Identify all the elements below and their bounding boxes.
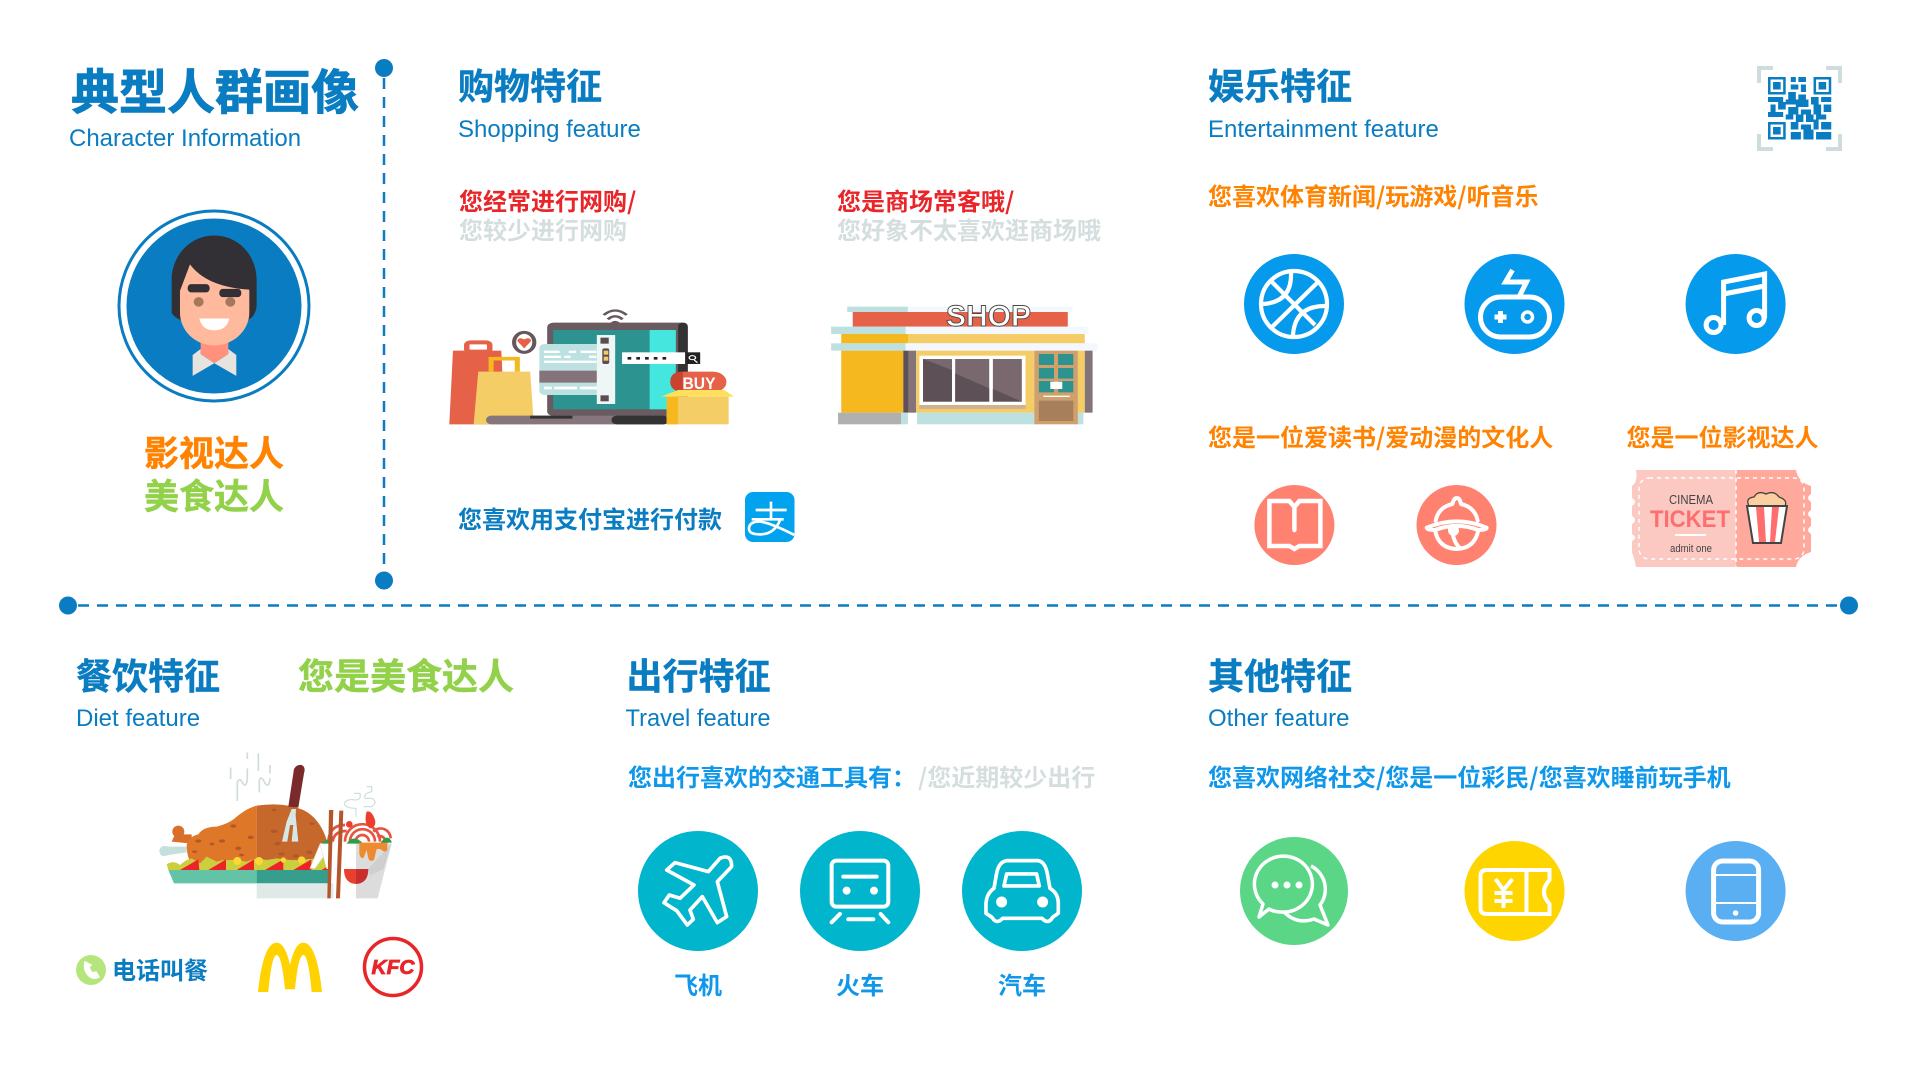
persona label: film: 影视达人 — [144, 435, 284, 474]
text: phone order: 电话叫餐 — [112, 951, 208, 986]
icon: basketball — [1244, 254, 1344, 354]
callout: food lover: 您是美食达人 — [298, 656, 514, 697]
panel: shopping — [449, 66, 1101, 542]
film fan text: 您是一位影视达人 — [1626, 418, 1818, 453]
label: train: 火车 — [836, 966, 884, 1001]
mall text: 您好象不太喜欢逛商场哦 — [837, 211, 1101, 246]
logo: McDonald's — [258, 943, 322, 992]
online shopping text — [459, 182, 636, 246]
logo: KFC — [364, 938, 422, 996]
subheading: Travel feature — [626, 705, 770, 732]
icon: lottery ticket — [1464, 841, 1564, 941]
subheading: Other feature — [1208, 705, 1349, 732]
infrequent travel text: /您近期较少出行 — [918, 758, 1095, 793]
QR code — [1759, 68, 1840, 149]
label: BUY: BUY — [682, 374, 716, 393]
icon: music — [1686, 254, 1786, 354]
icon: phone device — [1686, 841, 1786, 941]
culture text: 您是一位爱读书/爱动漫的文化人 — [1208, 418, 1553, 453]
heading: 餐饮特征 — [76, 656, 220, 697]
illustration: online shopping — [449, 310, 734, 424]
panel: character information — [69, 67, 359, 517]
panel: entertainment — [1208, 66, 1840, 567]
icon: car — [962, 831, 1082, 951]
heading: 出行特征 — [626, 656, 771, 697]
other traits text: 您喜欢网络社交/您是一位彩民/您喜欢睡前玩手机 — [1208, 758, 1731, 793]
heading: 购物特征 — [458, 66, 602, 107]
ticket — [1632, 470, 1811, 567]
shop sign: SHOP — [946, 300, 1031, 333]
heading: 其他特征 — [1208, 656, 1352, 697]
ticket: admit one — [1670, 543, 1712, 555]
icon: chat — [1240, 837, 1348, 945]
alipay text: 您喜欢用支付宝进行付款 — [458, 500, 722, 535]
interests text: 您喜欢体育新闻/玩游戏/听音乐 — [1208, 177, 1539, 212]
subheading: Diet feature — [76, 705, 200, 732]
icon: game controller — [1464, 254, 1564, 354]
online shopping text: 您较少进行网购 — [459, 211, 627, 246]
avatar — [119, 211, 309, 401]
panel: diet — [76, 656, 514, 996]
ticket: CINEMA — [1669, 492, 1713, 507]
subheading: Shopping feature — [458, 116, 641, 143]
label: car: 汽车 — [998, 966, 1046, 1001]
icon: train — [800, 831, 920, 951]
icon: bell — [1416, 485, 1496, 565]
illustration: food — [159, 752, 392, 898]
subheading: Entertainment feature — [1208, 116, 1439, 143]
panel: travel — [626, 656, 1095, 1001]
icon: phone — [76, 955, 106, 985]
subtitle: Character Information — [69, 125, 301, 152]
label: plane: 飞机 — [674, 966, 722, 1001]
panel: other — [1208, 656, 1786, 945]
mall text: 您是商场常客哦/ — [837, 182, 1014, 217]
title: 典型人群画像 — [71, 67, 359, 120]
icon: plane — [638, 831, 758, 951]
icon: alipay — [745, 492, 794, 542]
logo: KFC: KFC — [372, 957, 415, 979]
mall text — [837, 182, 1101, 246]
icon: book — [1254, 485, 1334, 565]
transport text: 您出行喜欢的交通工具有： — [628, 758, 916, 793]
persona label: food: 美食达人 — [144, 478, 284, 517]
ticket: TICKET — [1650, 506, 1730, 533]
heading: 娱乐特征 — [1208, 66, 1352, 107]
illustration: shop — [831, 307, 1098, 424]
online shopping text: 您经常进行网购/ — [459, 182, 636, 217]
